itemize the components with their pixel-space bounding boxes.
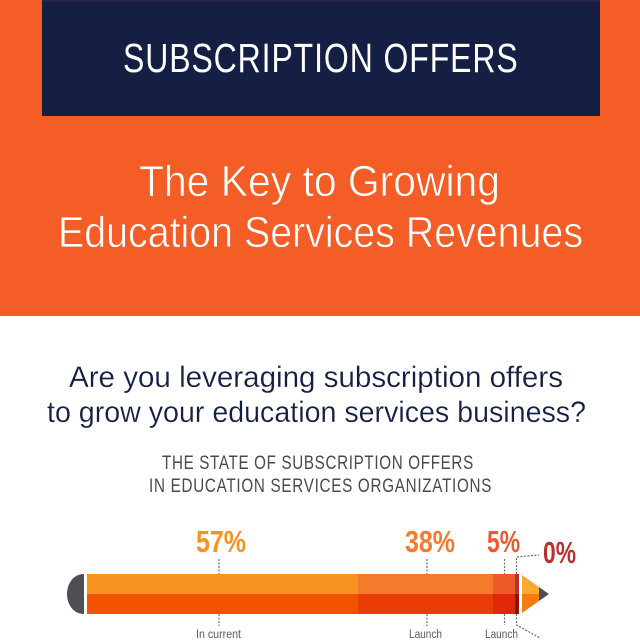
segment: 0% — [515, 574, 519, 614]
title banner — [42, 0, 600, 116]
question heading — [47, 361, 586, 429]
eraser — [67, 574, 84, 614]
subtitle: Education Services Revenues — [58, 209, 583, 257]
value: 38%: 38% — [405, 524, 455, 559]
segment: 38% — [358, 574, 493, 614]
leader lines — [219, 555, 540, 638]
title: SUBSCRIPTION OFFERS — [123, 35, 518, 81]
value: 5%: 5% — [487, 524, 520, 559]
value: 0%: 0% — [543, 535, 576, 570]
chart heading: THE STATE OF SUBSCRIPTION OFFERS — [162, 451, 473, 473]
pencil tip — [522, 575, 549, 613]
question heading: Are you leveraging subscription offers — [69, 361, 563, 394]
header background — [0, 0, 640, 316]
subtitle: The Key to Growing — [139, 158, 500, 206]
chart heading: IN EDUCATION SERVICES ORGANIZATIONS — [149, 474, 491, 496]
pencil chart — [67, 574, 549, 614]
segment: 5% — [493, 574, 516, 614]
value: 57%: 57% — [196, 524, 246, 559]
chart heading — [149, 451, 491, 496]
subtitle — [58, 158, 583, 257]
question heading: to grow your education services business? — [47, 396, 586, 429]
segment: 57% — [87, 574, 358, 614]
